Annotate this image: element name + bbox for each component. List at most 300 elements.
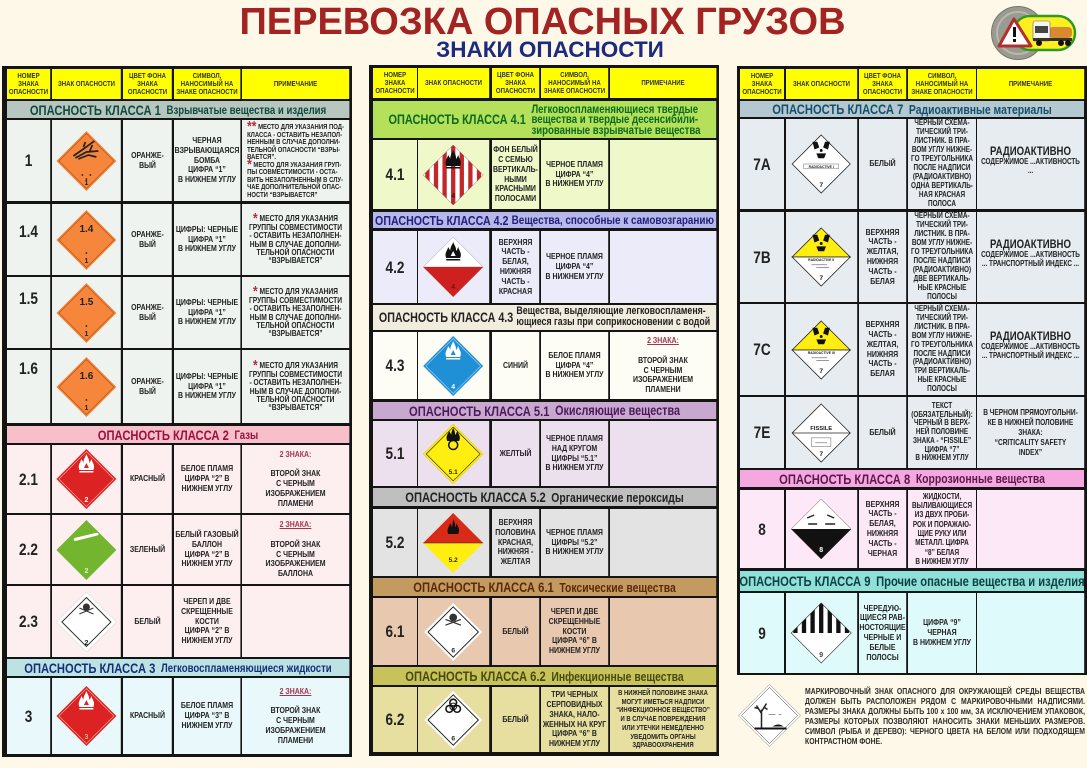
number: 6.2 <box>386 710 404 729</box>
subtitle: ЗНАКИ ОПАСНОСТИ <box>436 37 664 62</box>
header: sign <box>418 68 489 98</box>
icon: white skull sign <box>418 598 489 665</box>
icon: yellow radioactive sign: RADIOACTIVE III <box>808 350 835 354</box>
colour: ЩИЕСЯ РАВ- <box>860 612 905 622</box>
symbol: В НИЖНЕМ УГЛУ <box>546 271 603 281</box>
heading: class 4.2 <box>373 212 716 228</box>
icon: environmental hazard sign <box>738 684 801 747</box>
icon: blue flame sign <box>418 332 489 399</box>
panel: classes 1-3 <box>2 66 352 757</box>
number <box>7 277 50 348</box>
heading: class 2: Газы <box>234 428 258 442</box>
symbol: ВОМ УГЛУ НИЖНЕ- <box>912 331 972 340</box>
note: - ОСТАВИТЬ НЕЗАПОЛНЕН- <box>249 230 342 240</box>
colour <box>492 140 539 209</box>
colour: ЧЕРЕДУЮ- <box>864 603 901 613</box>
heading: class 3: ОПАСНОСТЬ КЛАССА 3 <box>24 660 155 676</box>
colour: ВЫЙ <box>139 238 156 248</box>
colour: ОРАНЖЕ- <box>131 376 164 386</box>
colour: ОРАНЖЕ- <box>131 302 164 312</box>
heading: class 8: ОПАСНОСТЬ КЛАССА 8 <box>779 470 910 486</box>
note: ИЛИ УТЕЧКИ НЕМЕДЛЕННО <box>622 723 704 732</box>
note: ВАЕТСЯ”. <box>247 152 276 161</box>
symbol <box>174 350 240 423</box>
symbol: ЗНАКА - “FISSILE” <box>913 436 971 445</box>
heading: class 1 <box>7 101 349 118</box>
row 6.1 <box>373 598 716 665</box>
number <box>373 140 417 209</box>
number <box>740 593 784 673</box>
icon: red and white striped sign: 4 <box>452 192 456 200</box>
icon: orange bomb sign: 1 <box>85 180 89 186</box>
header: colour: ЦВЕТ ФОНА <box>129 71 166 80</box>
symbol: НИЖНЕМ УГЛУ <box>182 483 232 493</box>
symbol <box>541 140 608 209</box>
symbol: ЩИЕ РУКУ ИЛИ <box>918 529 966 538</box>
symbol: (ОБЯЗАТЕЛЬНЫЙ): <box>911 410 973 419</box>
symbol: “8” БЕЛАЯ <box>925 548 959 557</box>
symbol: ВЫЛИВАЮЩИЕСЯ <box>912 501 972 510</box>
heading: class 4.2: Вещества, способные к самовозгаранию <box>512 213 714 227</box>
note: НЫМ В СЛУЧАЕ ДОПОЛНИ- <box>250 386 341 396</box>
note: РАДИОАКТИВНО <box>990 329 1071 343</box>
colour: ОРАНЖЕ- <box>131 229 164 239</box>
note: С ЧЕРНЫМ <box>276 715 315 725</box>
symbol: БОМБА <box>194 155 220 165</box>
symbol: НЫЕ КРАСНЫЕ <box>918 283 966 292</box>
row 2.3 <box>7 586 350 657</box>
colour: ПОЛОВИНА <box>495 527 536 537</box>
note: “ВЗРЫВАЕТСЯ” <box>268 328 323 338</box>
header: sign: ЗНАК ОПАСНОСТИ <box>58 79 115 88</box>
colour: БЕЛЫЙ <box>869 158 896 168</box>
number: 7B <box>753 248 771 266</box>
symbol: ДВЕ ВЕРТИКАЛЬ- <box>914 274 970 283</box>
symbol: ПОСЛЕ НАДПИСИ <box>913 348 971 358</box>
row 2.2 <box>7 515 350 584</box>
note <box>977 490 1084 568</box>
heading: class 5.2 <box>373 488 716 506</box>
text block: environmental sign requirements: РАЗМЕРЫ КОТОРЫХ ПОЗВОЛЯЮТ НАНОСИТЬ ЗНАКИ МЕНЬШИХ РАЗМЕРОВ. <box>805 716 1085 726</box>
note <box>977 397 1084 468</box>
colour: ЧАСТЬ - <box>868 266 897 276</box>
icon: yellow radioactive sign <box>786 212 857 302</box>
symbol: ЧЕРНОЕ ПЛАМЯ <box>546 433 603 443</box>
note: ВИТЬ НЕЗАПОЛНЕННЫМ В СЛУ- <box>247 174 343 184</box>
symbol: ИЗ ДВУХ ПРОБИ- <box>915 510 969 519</box>
heading: class 6.2: Инфекционные вещества <box>551 668 684 684</box>
heading: class 5.1: ОПАСНОСТЬ КЛАССА 5.1 <box>409 402 549 418</box>
heading: class 1: Взрывчатые вещества и изделия <box>167 102 326 116</box>
colour <box>123 120 172 201</box>
symbol: ЛИСТНИК. В ПРА- <box>914 136 970 145</box>
note <box>610 231 716 303</box>
number <box>7 204 50 275</box>
header: note <box>977 69 1084 99</box>
icon: white skull sign <box>52 586 121 657</box>
symbol: СКРЕЩЕННЫЕ <box>181 606 233 616</box>
header: number: ЗНАКА <box>18 79 39 88</box>
colour: БЕЛЫЙ <box>502 714 529 724</box>
heading: class 9: Прочие опасные вещества и изделия <box>876 573 1085 589</box>
symbol: ЦИФРЫ: ЧЕРНЫЕ <box>176 224 238 234</box>
symbol: НИЖНЕМ УГЛУ <box>182 720 232 730</box>
symbol: КОСТИ <box>195 616 219 626</box>
number: 5.1 <box>386 444 404 463</box>
number: 7A <box>753 154 771 174</box>
icon: white skull sign: 2 <box>85 640 89 646</box>
icon: orange sign 1.4: 1 <box>85 258 89 264</box>
symbol: ЦИФРА “2” В <box>185 548 229 558</box>
symbol: ЦИФРА “2” В <box>185 625 229 635</box>
colour <box>123 277 172 348</box>
symbol: В НИЖНЕМ УГЛУ <box>546 546 603 556</box>
colour <box>859 397 906 468</box>
symbol: ТРИ ЧЕРНЫХ <box>551 689 598 699</box>
row 1 <box>7 118 350 201</box>
symbol: ПОСЛЕ НАДПИСИ <box>913 256 971 265</box>
header: colour: ЗНАКА <box>872 79 893 88</box>
symbol: В НИЖНЕМ УГЛУ <box>178 390 236 400</box>
note: ИЗОБРАЖЕНИЕМ <box>265 488 326 498</box>
panel: classes 7-9 <box>737 66 1087 675</box>
heading: class 5.1: Окисляющие вещества <box>555 403 680 418</box>
icon: green cylinder sign: 2 <box>85 568 89 574</box>
colour <box>859 593 906 673</box>
header: number: ЗНАКА <box>752 79 772 88</box>
colour: НОСТОЯЩИЕ <box>859 622 906 632</box>
symbol: БЕЛОЕ ПЛАМЯ <box>181 700 233 710</box>
symbol: ЧЕРНАЯ <box>192 135 222 145</box>
number <box>740 119 784 209</box>
colour <box>492 598 539 665</box>
note: ПЛАМЕНИ <box>278 498 313 508</box>
number <box>740 490 784 568</box>
symbol: ВОМ УГЛУ НИЖНЕ- <box>912 145 972 154</box>
header: symbol: ЗНАКЕ ОПАСНОСТИ <box>544 86 605 95</box>
symbol: ЧЕРЕП И ДВЕ <box>183 596 231 606</box>
colour: БЕЛАЯ, <box>869 518 896 528</box>
number <box>373 509 417 576</box>
symbol: ЦИФРА “6” В <box>552 635 597 645</box>
heading: class 7 <box>740 101 1084 117</box>
symbol <box>174 204 240 275</box>
note: * МЕСТО ДЛЯ УКАЗАНИЯ ГРУП- <box>247 156 341 172</box>
header: number <box>7 69 50 99</box>
colour: НИЖНЯЯ <box>867 528 898 538</box>
number <box>7 678 50 754</box>
note: ... <box>1028 166 1033 174</box>
number: 1.6 <box>19 359 38 378</box>
header: number <box>373 68 417 98</box>
symbol: МЕТАЛЛ. ЦИФРА <box>915 538 969 547</box>
heading: class 1: ОПАСНОСТЬ КЛАССА 1 <box>30 102 161 118</box>
symbol: В НИЖНЕМ УГЛУ <box>915 557 969 566</box>
header: sign: ЗНАК ОПАСНОСТИ <box>425 78 482 87</box>
header: note: ПРИМЕЧАНИЕ <box>1009 79 1052 88</box>
header: colour: ОПАСНОСТИ <box>128 87 167 96</box>
icon: yellow radioactive sign: 7 <box>820 368 824 375</box>
symbol: ТИЧЕСКИЙ ТРИ- <box>916 127 968 136</box>
note: ГРУППЫ СОВМЕСТИМОСТИ <box>249 295 342 305</box>
note: - ОСТАВИТЬ НЕЗАПОЛНЕН- <box>249 303 342 313</box>
icon: blue flame sign: 4 <box>452 384 456 390</box>
symbol: ТРИ ВЕРТИКАЛЬ- <box>914 366 970 375</box>
heading: class 5.2: Органические пероксиды <box>551 490 684 504</box>
note: “ВЗРЫВАЕТСЯ” <box>268 402 323 412</box>
symbol <box>174 277 240 348</box>
table header <box>740 69 1084 99</box>
heading: class 6.2: ОПАСНОСТЬ КЛАССА 6.2 <box>405 668 546 684</box>
heading: class 2 <box>7 426 349 443</box>
note: СОДЕРЖИМОЕ ...АКТИВНОСТЬ <box>981 250 1080 258</box>
symbol: ЧЕРНЫЙ В ВЕРХ- <box>914 418 970 427</box>
note: ПЛАМЕНИ <box>645 384 681 394</box>
note: СОДЕРЖИМОЕ ...АКТИВНОСТЬ <box>981 342 1080 351</box>
note: ЧАЕ ДОПОЛНИТЕЛЬНОЙ ОПАС- <box>247 182 341 191</box>
note: ** МЕСТО ДЛЯ УКАЗАНИЯ ПОД- <box>247 118 344 135</box>
symbol: (РАДИОАКТИВНО) <box>913 357 971 366</box>
colour: ЧЕРНЫЕ И <box>864 632 901 642</box>
row 7B <box>740 211 1084 302</box>
note: ЗНАКА: <box>1018 428 1043 436</box>
heading: class 4.3: ОПАСНОСТЬ КЛАССА 4.3 <box>379 310 513 325</box>
text block: environmental sign requirements <box>805 686 1085 746</box>
symbol: (РАДИОАКТИВНО) <box>913 265 971 274</box>
number: 2.3 <box>19 612 38 631</box>
note: 2 ЗНАКА: <box>280 449 311 459</box>
symbol <box>908 397 976 468</box>
number <box>740 212 784 302</box>
icon: yellow radioactive sign: 7 <box>820 275 824 282</box>
number <box>373 687 417 752</box>
icon: corrosive sign <box>786 490 857 568</box>
number <box>7 445 50 513</box>
icon: white and red sign: 4 <box>452 284 456 291</box>
symbol <box>174 586 240 657</box>
text block: environmental sign requirements: МАРКИРОВОЧНЫЙ ЗНАК ОПАСНОГО ДЛЯ ОКРУЖАЮЩЕЙ СРЕДЫ ВЕЩЕСТВА <box>805 686 1085 696</box>
note <box>977 119 1084 209</box>
header: colour: ЦВЕТ ФОНА <box>497 70 534 79</box>
text block: environmental sign requirements: СИМВОЛ (РЫБА И ДЕРЕВО): ЧЕРНОГО ЦВЕТА НА БЕЛОМ ИЛИ ПОДХОДЯЩЕМ <box>805 726 1085 736</box>
note: ГРУППЫ СОВМЕСТИМОСТИ <box>249 222 342 232</box>
colour <box>123 515 172 584</box>
icon: orange sign 1.6: 1.6 <box>80 370 94 382</box>
header: symbol: ЗНАКЕ ОПАСНОСТИ <box>176 87 238 96</box>
note: НЫМ В СЛУЧАЕ ДОПОЛНИ- <box>250 312 341 322</box>
symbol: СЕРПОВИДНЫХ <box>546 699 603 709</box>
symbol: В НИЖНЕМ УГЛУ <box>178 316 236 326</box>
header: symbol: СИМВОЛ, <box>193 71 221 80</box>
header: symbol: ЗНАКЕ ОПАСНОСТИ <box>911 87 973 96</box>
colour: КРАСНАЯ <box>499 286 532 296</box>
number <box>373 598 417 665</box>
colour <box>492 231 539 303</box>
colour: ЖЕЛТАЯ <box>501 556 530 566</box>
header: colour <box>123 69 172 99</box>
symbol: В НИЖНЕМ УГЛУ <box>546 178 603 188</box>
note: ПЛАМЕНИ <box>278 735 313 745</box>
text block: environmental sign requirements: РАЗМЕРЫ ЗНАКА ДОЛЖНЫ БЫТЬ 100 х 100 мм, ЗА ИСКЛЮЧЕНИЕМ УПАКОВОК, <box>805 706 1085 716</box>
header: symbol: НАНОСИМЫЙ НА <box>916 79 968 88</box>
header: colour: ЦВЕТ ФОНА <box>864 71 901 80</box>
symbol: В НИЖНЕМ УГЛУ <box>178 243 236 253</box>
icon: orange sign 1.5: 1 <box>85 330 89 338</box>
heading: class 5.1 <box>373 402 716 419</box>
heading: class 5.2: ОПАСНОСТЬ КЛАССА 5.2 <box>405 489 546 505</box>
symbol: НАЯ КРАСНАЯ <box>919 190 965 199</box>
symbol: КОСТИ <box>563 626 586 636</box>
symbol: ЖИДКОСТИ, <box>923 492 961 501</box>
symbol: ЛИСТНИК. В ПРА- <box>914 322 970 331</box>
symbol: ПОЛОСЫ <box>927 384 957 393</box>
colour: БЕЛАЯ <box>870 276 895 286</box>
note: INDEX” <box>1019 448 1042 456</box>
header: number: НОМЕР <box>384 70 406 79</box>
note: ТЕЛЬНОЙ ОПАСНОСТИ <box>257 394 334 404</box>
symbol: ОДНА ВЕРТИКАЛЬ- <box>911 181 973 190</box>
icon: white radioactive sign: 7 <box>820 182 824 189</box>
symbol <box>174 515 240 584</box>
colour <box>859 304 906 395</box>
note: - ОСТАВИТЬ НЕЗАПОЛНЕН- <box>249 377 342 387</box>
icon: white biohazard sign: 6 <box>452 735 456 742</box>
note: С ЧЕРНЫМ <box>644 364 682 374</box>
colour: ЧАСТЬ - <box>868 538 897 548</box>
colour: ВЫЙ <box>139 160 156 170</box>
heading: class 7: Радиоактивные материалы <box>909 102 1052 116</box>
heading: class 4.3 <box>373 305 716 330</box>
colour: НИЖНЯЯ <box>867 256 898 266</box>
heading: class 4.1: зированные взрывчатые вещества <box>531 123 700 137</box>
colour: ВЫЙ <box>139 386 156 396</box>
symbol: НАД КРУГОМ <box>552 443 597 453</box>
header: note: ПРИМЕЧАНИЕ <box>274 79 317 88</box>
symbol: БЕЛОЕ ПЛАМЯ <box>548 350 601 360</box>
note <box>242 204 349 275</box>
note: “ВЗРЫВАЕТСЯ” <box>268 255 323 265</box>
symbol: ЛИСТНИК. В ПРА- <box>914 229 970 238</box>
symbol <box>541 687 608 752</box>
colour: ФОН БЕЛЫЙ <box>493 144 538 154</box>
header: note <box>610 68 716 98</box>
icon: logo with tyre, warning triangle and truck <box>991 6 1076 60</box>
note <box>977 304 1084 395</box>
colour: НИЖНЯЯ <box>500 266 531 276</box>
number <box>7 515 50 584</box>
heading: class 8: Коррозионные вещества <box>916 471 1045 486</box>
colour: БЕЛЫЙ <box>869 427 896 437</box>
colour: ВЕРХНЯЯ <box>866 319 899 329</box>
note <box>242 586 349 657</box>
icon: orange sign 1.5 <box>52 277 121 348</box>
colour <box>123 445 172 513</box>
symbol: ПОЛОСЫ <box>927 292 957 301</box>
colour: ЧАСТЬ - <box>868 508 897 518</box>
symbol: ЦИФРА “2” В <box>185 473 229 483</box>
table header <box>7 69 350 99</box>
icon: white and red sign <box>418 231 489 303</box>
colour: ПОЛОСЫ <box>866 652 899 662</box>
header: number: НОМЕР <box>751 71 773 80</box>
symbol: БАЛЛОН <box>192 539 222 549</box>
note: КЛАССА - ОСТАВИТЬ НЕЗАПОЛ- <box>247 130 342 138</box>
number: 2.2 <box>19 540 38 559</box>
symbol <box>174 445 240 513</box>
note <box>977 593 1084 673</box>
number: 3 <box>25 706 32 726</box>
icon: red and yellow sign: 5.2 <box>449 556 458 564</box>
icon: red flame sign: 2 <box>85 497 89 504</box>
symbol: В НИЖНЕМ УГЛУ <box>915 453 969 462</box>
note: ИЗОБРАЖЕНИЕМ <box>265 725 326 735</box>
symbol <box>541 421 608 486</box>
symbol <box>908 490 976 568</box>
header: number: ОПАСНОСТИ <box>375 86 415 95</box>
row 1.4 <box>7 204 350 275</box>
icon: orange sign 1.4: 1.4 <box>80 224 94 234</box>
note <box>242 277 349 348</box>
number: 4.1 <box>386 165 404 184</box>
symbol <box>541 332 608 399</box>
symbol: НИЖНЕМ УГЛУ <box>182 635 232 645</box>
number <box>7 586 50 657</box>
row 2.1 <box>7 445 350 513</box>
note: ВТОРОЙ ЗНАК <box>271 539 320 549</box>
note <box>610 332 716 399</box>
note: НОСТИ “ВЗРЫВАЕТСЯ” <box>247 190 317 198</box>
header: number: ЗНАКА <box>385 78 405 87</box>
colour: БЕЛАЯ, <box>502 256 529 266</box>
header: number: ОПАСНОСТИ <box>9 87 48 96</box>
number: 1.5 <box>19 288 38 308</box>
colour: НИЖНЯЯ - <box>498 546 533 556</box>
symbol <box>908 593 976 673</box>
note <box>977 212 1084 302</box>
heading: class 4.3: Вещества, выделяющие легковоспламеня- <box>516 304 706 316</box>
colour: ОРАНЖЕ- <box>131 150 164 160</box>
note: “CRITICALITY SAFETY <box>995 438 1066 446</box>
colour: КРАСНЫЙ <box>130 710 165 720</box>
symbol: НИЖНЕМ УГЛУ <box>549 738 600 748</box>
row 4.2 <box>373 231 716 303</box>
header: symbol: СИМВОЛ, <box>560 70 589 79</box>
heading: class 2: ОПАСНОСТЬ КЛАССА 2 <box>98 426 229 442</box>
colour: КРАСНАЯ, <box>498 537 533 547</box>
symbol: ЧЕРНАЯ <box>927 627 957 637</box>
symbol <box>541 509 608 576</box>
header: symbol <box>541 68 608 98</box>
icon: orange sign 1.5: 1.5 <box>80 296 94 308</box>
symbol: ЦИФРА “4” <box>556 261 593 271</box>
row 5.2 <box>373 509 716 576</box>
row 7C <box>740 304 1084 395</box>
header: symbol: СИМВОЛ, <box>928 71 956 80</box>
colour: БЕЛАЯ <box>870 368 895 378</box>
icon: red flame sign: 3 <box>85 734 89 741</box>
icon: fissile sign <box>786 397 857 468</box>
heading: class 7: ОПАСНОСТЬ КЛАССА 7 <box>772 101 903 117</box>
note: НЕННЫМ В СЛУЧАЕ ДОПОЛНИ- <box>247 137 340 146</box>
colour <box>123 678 172 754</box>
row 3 <box>7 678 350 754</box>
icon: white radioactive sign <box>786 119 857 209</box>
colour <box>859 212 906 302</box>
header: sign: ЗНАК ОПАСНОСТИ <box>793 79 850 88</box>
note: НЫМ В СЛУЧАЕ ДОПОЛНИ- <box>250 238 341 248</box>
note: С ЧЕРНЫМ <box>276 478 315 488</box>
symbol: НЕЙ ПОЛОВИНЕ <box>916 427 968 436</box>
